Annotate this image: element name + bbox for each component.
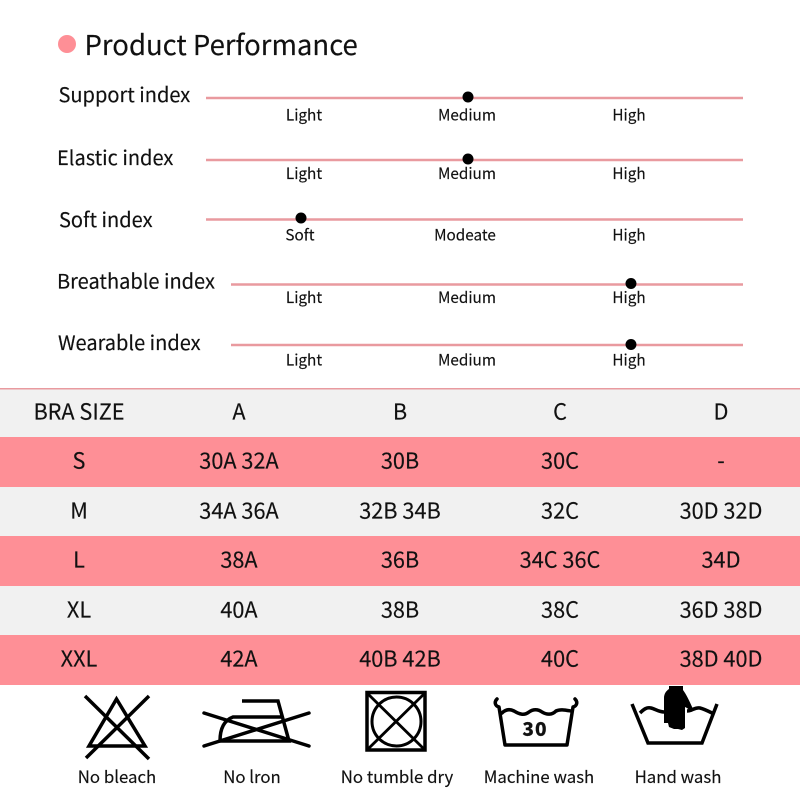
wearable index scale: Wearable index: [58, 327, 201, 356]
row XL: 40A: [220, 594, 258, 624]
soft index scale: Soft index: [59, 204, 153, 233]
elastic index scale: Medium: [438, 162, 496, 184]
row XXL: 42A: [220, 642, 258, 674]
panel: performance indexes: [57, 79, 743, 370]
row M: 32C: [541, 494, 579, 526]
row L: [0, 536, 800, 586]
row M: M: [70, 494, 88, 526]
icon: machine wash: 30: [522, 715, 548, 742]
row M: 30D 32D: [680, 494, 762, 526]
table header row: A: [232, 396, 246, 426]
row S: 30A 32A: [199, 444, 279, 476]
row XXL: XXL: [61, 642, 98, 674]
elastic index scale: Elastic index: [57, 142, 173, 171]
icon: machine wash: Machine wash: [484, 764, 594, 788]
breathable index scale: High: [612, 286, 646, 308]
soft index scale: Modeate: [434, 224, 496, 246]
icon: machine wash: [484, 699, 594, 788]
elastic index scale: Light: [286, 162, 322, 184]
icon: no tumble dry: No tumble dry: [341, 764, 453, 788]
row M: 32B 34B: [359, 494, 441, 526]
support index scale: High: [612, 104, 646, 126]
row XL: 38C: [541, 594, 579, 624]
row XL: 36D 38D: [680, 594, 762, 624]
row XXL: 40C: [541, 642, 579, 674]
table header row: B: [393, 396, 407, 426]
breathable index scale: [57, 266, 743, 308]
icon: no bleach: No bleach: [78, 764, 156, 788]
row XL: 38B: [381, 594, 419, 624]
breathable index scale: Breathable index: [57, 266, 215, 294]
row S: -: [717, 444, 725, 476]
icon: no iron: No lron: [223, 764, 281, 788]
support index scale: Support index: [58, 79, 190, 108]
row L: L: [73, 544, 85, 574]
wearable index scale: Light: [286, 348, 322, 370]
table header row: BRA SIZE: [33, 396, 125, 426]
breathable index scale: Medium: [438, 286, 496, 308]
row S: S: [73, 444, 85, 476]
wearable index scale: [58, 327, 743, 370]
row M: [0, 487, 800, 536]
row S: 30B: [381, 444, 419, 476]
icon: hand wash: Hand wash: [635, 764, 721, 788]
row XXL: 40B 42B: [359, 642, 441, 674]
table header row: D: [714, 396, 728, 426]
row XL: [0, 586, 800, 635]
soft index scale: High: [612, 224, 646, 246]
table header row: C: [553, 396, 567, 426]
wearable index scale: High: [612, 348, 646, 370]
icon: hand wash: [632, 686, 721, 788]
icon: no iron: [204, 701, 309, 788]
title: Product Performance: [84, 23, 358, 63]
row S: [0, 437, 800, 487]
icon: no tumble dry: [341, 692, 453, 788]
size table: [0, 388, 800, 685]
soft index scale: [59, 204, 743, 246]
table header row: [0, 388, 800, 437]
support index scale: Light: [286, 104, 322, 126]
row XXL: [0, 635, 800, 685]
elastic index scale: High: [612, 162, 646, 184]
row S: 30C: [541, 444, 579, 476]
elastic index scale: [57, 142, 743, 184]
row L: 34C 36C: [520, 544, 600, 574]
soft index scale: Soft: [285, 224, 315, 246]
row L: 38A: [220, 544, 258, 574]
row M: 34A 36A: [199, 494, 279, 526]
row XXL: 38D 40D: [680, 642, 762, 674]
wearable index scale: Medium: [438, 348, 496, 370]
row L: 36B: [381, 544, 419, 574]
icon: no bleach: [78, 696, 156, 788]
row L: 34D: [702, 544, 740, 574]
row XL: XL: [67, 594, 91, 624]
breathable index scale: Light: [286, 286, 322, 308]
support index scale: [58, 79, 743, 126]
support index scale: Medium: [438, 104, 496, 126]
